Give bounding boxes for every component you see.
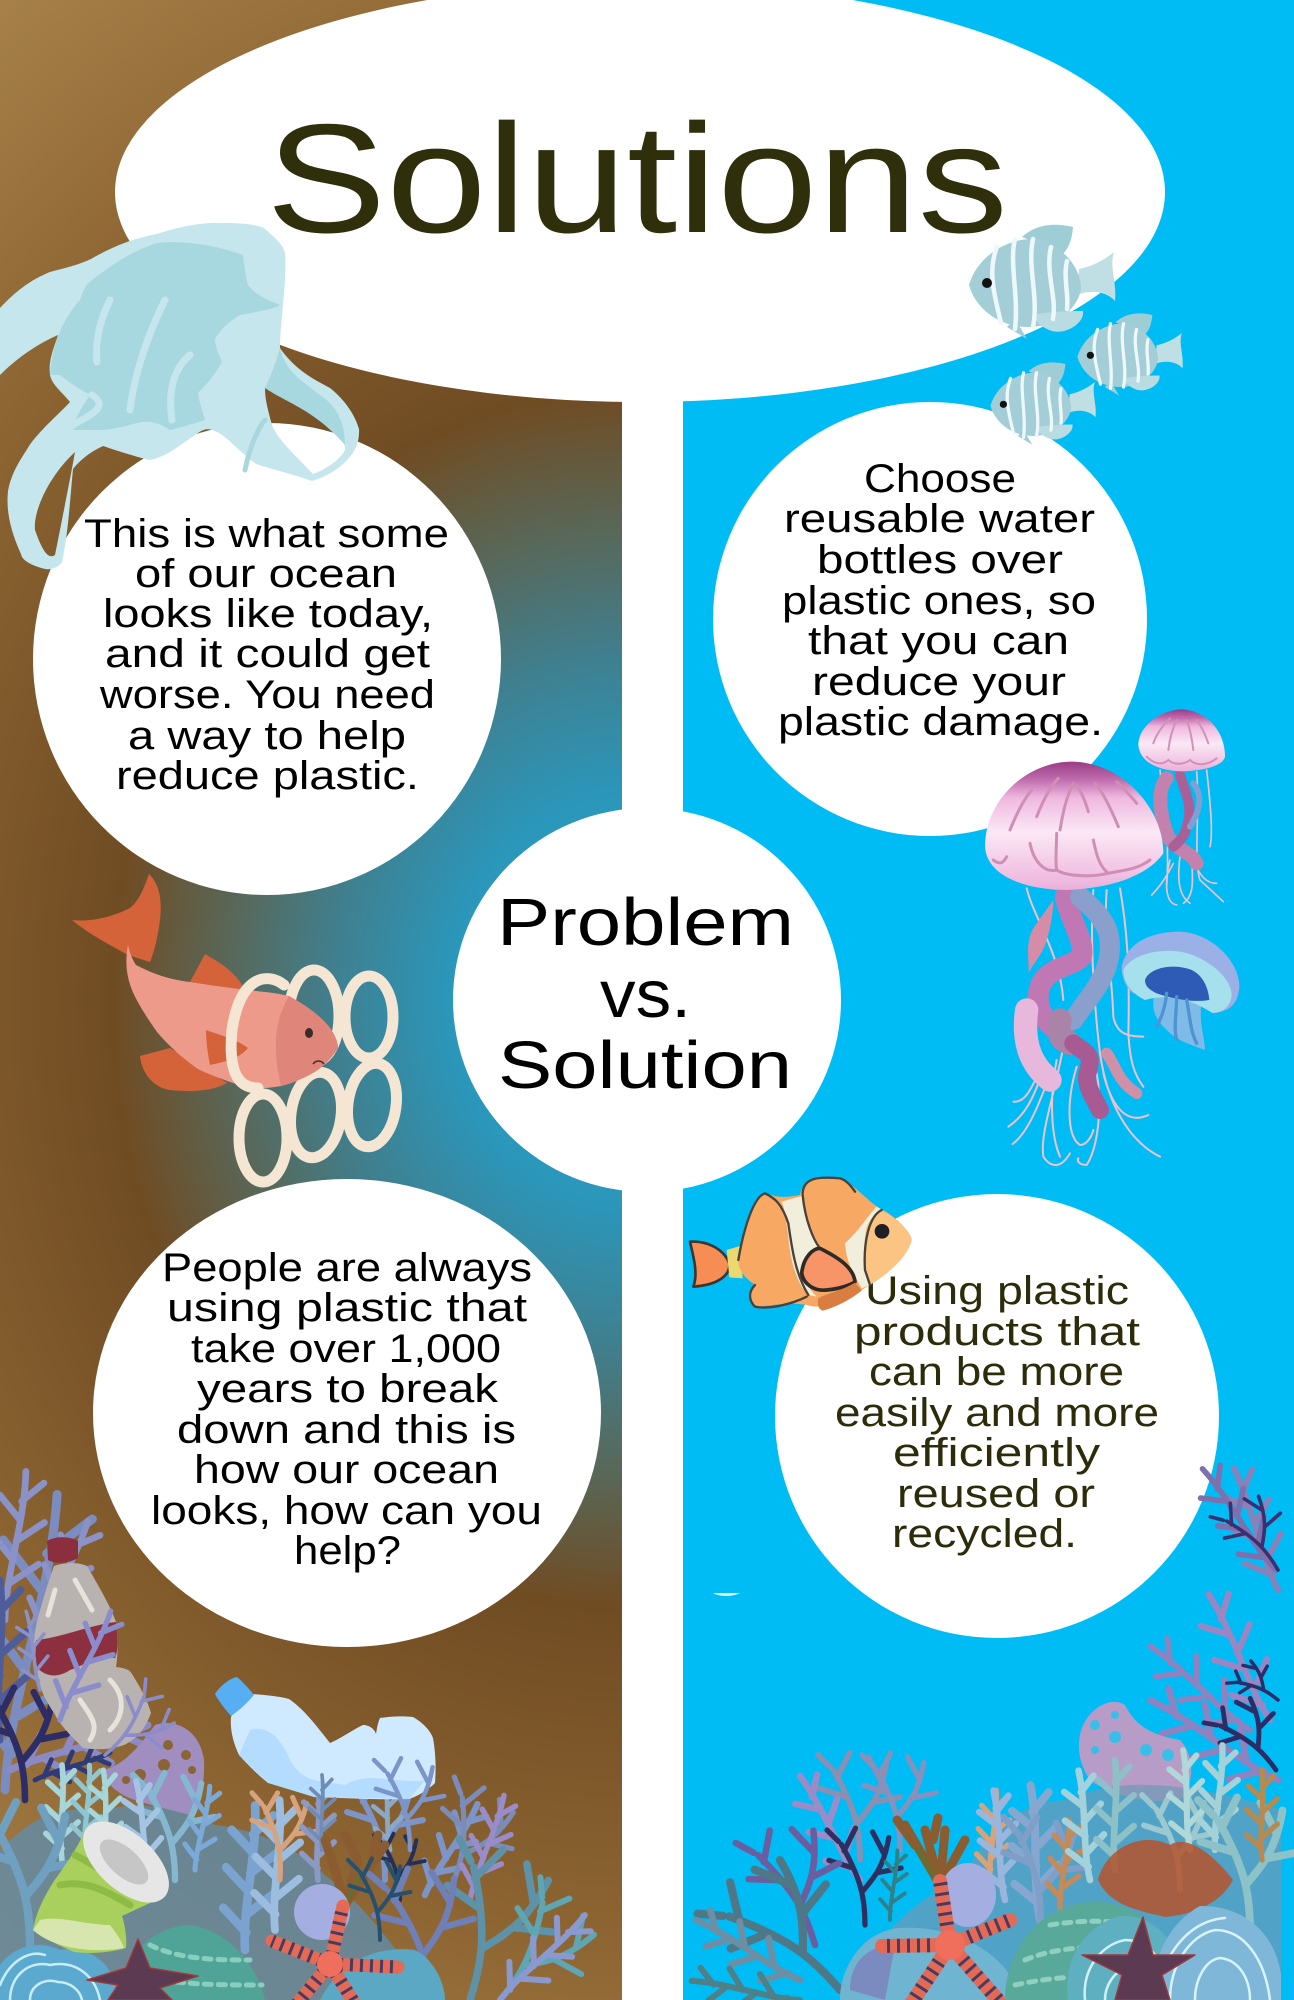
- crushed water bottle: [215, 1677, 436, 1799]
- fish one: [969, 225, 1115, 339]
- text: reusable bottles: [778, 457, 1103, 744]
- six-pack ring front: [231, 979, 284, 1088]
- blue jellyfish: [1122, 932, 1239, 1050]
- coral mass blue: [0, 1805, 440, 2000]
- circle: solution one: [713, 402, 1147, 836]
- right edge purple branches: [1136, 1456, 1294, 1802]
- sponge: [103, 1723, 204, 1815]
- text: 1,000 years: People are always: [162, 1246, 532, 1290]
- brown seaweed: [325, 1835, 385, 1905]
- text: reusable bottles: bottles over: [817, 538, 1063, 582]
- purple patterned rock: [940, 1863, 996, 1927]
- panel: solution side background: [683, 0, 1294, 2000]
- branches over water bottle: [309, 1758, 530, 1906]
- text: reusable bottles: plastic ones, so: [782, 579, 1096, 623]
- small white sliver: [713, 1593, 740, 1596]
- text: 1,000 years: take over 1,000: [191, 1327, 501, 1371]
- text: ocean today: This is what some: [84, 512, 449, 556]
- dark starfish: [1082, 1917, 1195, 2000]
- six-pack rings back: [239, 970, 402, 1182]
- title: Solutions: [266, 92, 1008, 265]
- central heading: Solution: [498, 1028, 792, 1103]
- text: 1,000 years: down and this is: [177, 1408, 516, 1452]
- dark starfish: [87, 1939, 198, 2000]
- panel: problem side background: [0, 0, 622, 2000]
- dorsal and lower fins: [140, 954, 245, 1091]
- circle: solution two: [775, 1194, 1219, 1638]
- red starfish: [882, 1881, 1010, 2000]
- stripes: [782, 1196, 882, 1297]
- central heading: vs.: [600, 957, 691, 1032]
- body: [738, 1178, 912, 1307]
- text: ocean today: reduce plastic.: [116, 754, 419, 798]
- icon: clownfish: [690, 1178, 912, 1311]
- fan coral: [0, 1945, 118, 2000]
- crushed green can: [33, 1806, 183, 1953]
- central coral: [975, 1744, 1294, 1933]
- text: reuse and recycle: recycled.: [892, 1512, 1077, 1556]
- text: reuse and recycle: can be more: [869, 1350, 1124, 1394]
- text: ocean today: of our ocean: [135, 552, 397, 596]
- text: reuse and recycle: products that: [854, 1310, 1140, 1354]
- big pink jellyfish: [985, 762, 1163, 1165]
- body: [126, 945, 338, 1088]
- text: reuse and recycle: easily and more: [835, 1391, 1159, 1435]
- eye: [875, 1224, 889, 1239]
- left reef: [0, 1468, 614, 2000]
- text: 1,000 years: years to break: [197, 1367, 499, 1411]
- text: 1,000 years: [151, 1246, 542, 1573]
- sponge: [1079, 1702, 1191, 1801]
- coral branches: [0, 1764, 493, 1952]
- brown seaweed: [897, 1818, 965, 1885]
- fish three: [990, 362, 1096, 445]
- text: 1,000 years: help?: [294, 1529, 401, 1573]
- small pink jellyfish: [1138, 709, 1225, 905]
- icon: striped fish school: [969, 225, 1183, 445]
- blue rock: [840, 1928, 1015, 2000]
- text: reusable bottles: reduce your: [812, 660, 1066, 704]
- text: ocean today: a way to help: [128, 714, 406, 758]
- lower right coral trees: [348, 1836, 614, 2000]
- pectoral fin: [802, 1248, 855, 1290]
- crushed soda bottle: [34, 1537, 151, 1749]
- text: ocean today: and it could get: [105, 632, 430, 676]
- text: reusable bottles: Choose: [864, 457, 1016, 501]
- icon: jellyfish group: [985, 709, 1239, 1165]
- foreground branches over bottle: [13, 1603, 187, 1778]
- face: [276, 996, 338, 1086]
- back purple branches: [0, 1468, 156, 1800]
- head and top shading: [864, 1210, 912, 1285]
- red starfish: [272, 1906, 398, 2000]
- circle: problem statement one: [33, 423, 501, 895]
- text: reuse and recycle: reused or: [897, 1472, 1095, 1516]
- text: reusable bottles: plastic damage.: [778, 700, 1103, 744]
- brain coral: [120, 1925, 265, 2000]
- circle: problem vs solution centre: [453, 808, 841, 1192]
- central heading: Problem: [497, 885, 794, 960]
- central heading: [497, 885, 794, 1103]
- fish two: [1077, 313, 1183, 396]
- text: 1,000 years: how our ocean: [194, 1448, 499, 1492]
- circle: problem statement two: [93, 1179, 601, 1647]
- icon: plastic bag: [0, 223, 359, 569]
- text: reusable bottles: that you can: [808, 619, 1069, 663]
- orange fan coral: [1098, 1840, 1233, 1917]
- blue rock: [320, 1949, 445, 2000]
- text: reuse and recycle: efficiently: [893, 1431, 1100, 1475]
- brain coral: [1005, 1902, 1175, 2000]
- branches purple blue: [686, 1753, 936, 2000]
- tail: [690, 1242, 729, 1287]
- text: reuse and recycle: Using plastic: [865, 1269, 1129, 1313]
- purple patterned rock: [294, 1884, 350, 1940]
- right reef: [686, 1456, 1294, 2000]
- text: reusable bottles: reusable water: [784, 497, 1095, 541]
- pectoral fin: [206, 1030, 248, 1065]
- eye and mouth: [305, 1028, 324, 1064]
- text: 1,000 years: using plastic that: [167, 1286, 527, 1330]
- coral mass base: [840, 1785, 1281, 2000]
- title ellipse: [115, 0, 1165, 402]
- tail fin: [72, 874, 161, 962]
- text: 1,000 years: looks, how can you: [151, 1489, 542, 1533]
- fin outlines: [738, 1178, 882, 1308]
- text: ocean today: looks like today,: [103, 592, 433, 636]
- text: reuse and recycle: [835, 1269, 1159, 1556]
- text: ocean today: worse. You need: [99, 673, 435, 717]
- fan corals: [1067, 1906, 1281, 2000]
- icon: pink fish trapped in six-pack rings: [72, 874, 402, 1182]
- text: ocean today: [84, 512, 449, 798]
